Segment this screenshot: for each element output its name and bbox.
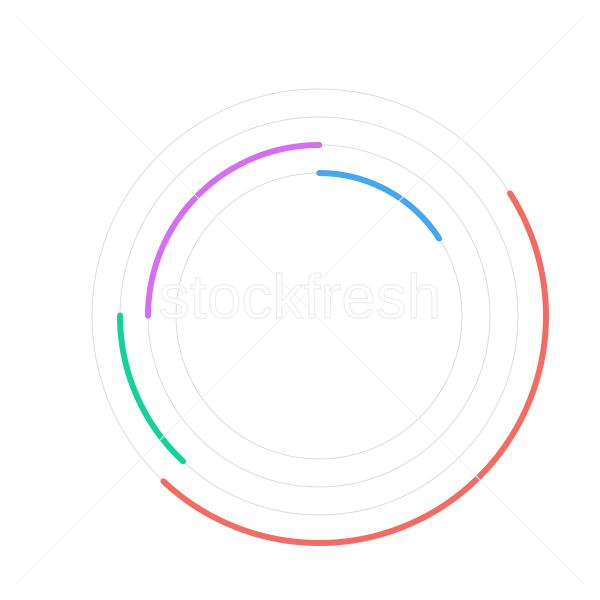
arc: green (120, 117, 518, 515)
arc: blue inner (176, 173, 462, 459)
arc: red outer (92, 89, 546, 543)
watermark text: stockfresh (159, 263, 441, 332)
arc: purple (148, 145, 490, 487)
